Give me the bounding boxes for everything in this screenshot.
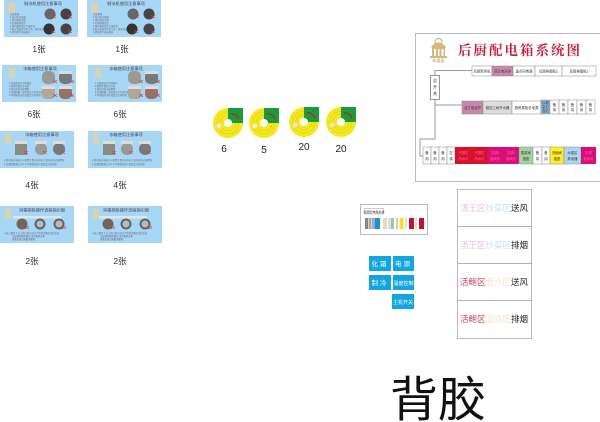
button: 制冷: 制冷	[372, 278, 388, 287]
card: fridge notice 4 photos, left: 冰箱使用注意事项	[23, 65, 58, 72]
card: ice machine notice, left: 4.保持通风良好干燥环境	[10, 24, 36, 28]
card: ice machine notice, right: 2.请勿堆放杂物	[93, 18, 109, 22]
card: fridge notice 3 photos, right: 1.请勿敞开冰箱门 2.熟食生食分开存放 3.请勿存放过热食物	[92, 158, 153, 162]
card: ice machine notice, right: 4.保持通风良好干燥环境	[93, 24, 119, 28]
card: fridge notice 3 photos, right: 冰箱使用注意事项	[109, 131, 144, 138]
row 1 breakers: 重点间电源	[516, 68, 533, 74]
quantity label: 6张	[27, 109, 41, 119]
disk count: 6	[221, 144, 227, 155]
card: fridge notice 4 photos, left	[2, 65, 76, 102]
row 1 breakers: 后厨排烟机1	[539, 68, 558, 74]
card: ice machine notice, right: 注意事项	[93, 12, 103, 16]
button: 电源: 电源	[395, 259, 412, 268]
main switch: 关	[433, 90, 437, 97]
card: fridge notice 4 photos, right: 5.不得擅自调节温度及关闭电源	[95, 93, 127, 97]
button: 主机开关	[392, 294, 414, 309]
card: sterilizer steps, left	[0, 206, 74, 243]
card: ice machine notice, right: 制冰机使用注意事项	[107, 0, 146, 7]
card: ice machine notice, left: 3.定期更换滤芯	[10, 21, 26, 25]
card: ice machine notice, left: 1.每日清洁机器	[10, 15, 26, 19]
card: fridge notice 3 photos, left	[0, 131, 74, 168]
card: fridge notice 3 photos, left: 4.定期除霜清洁卫生 5.不得擅自调节温度及关闭电源	[4, 162, 57, 166]
card: fridge notice 4 photos, left: 4.定期除霜，保持清洁卫生及时清理	[9, 90, 46, 94]
row 2 breakers: 区灯	[542, 104, 549, 109]
diagram title: 后厨配电箱系统图	[458, 39, 582, 59]
row 1 breakers	[472, 66, 596, 76]
panel: distribution box system diagram	[416, 34, 600, 182]
row 2 breakers: 备	[553, 102, 557, 107]
quantity label: 1张	[32, 44, 46, 54]
card: ice machine notice, right: 6.请勿用手直接取冰	[93, 30, 114, 34]
quantity label: 4张	[113, 180, 127, 190]
wiring lines	[420, 70, 472, 156]
quantity label: 2张	[25, 256, 39, 266]
logo: 和喜居	[432, 57, 444, 63]
button: 温度控制: 温度控制	[393, 280, 414, 287]
row label: 活鲍区 面点区 排烟: 活鲍区面点区排烟	[460, 314, 528, 324]
card: fridge notice 3 photos, left: 1.请勿敞开冰箱门 2.熟食生食分开存放 3.请勿存放过热食物	[4, 158, 65, 162]
card: ice machine notice, right: 1.每日清洁机器	[93, 15, 109, 19]
table: zone fan labels	[458, 190, 532, 338]
main switch	[430, 76, 440, 100]
card: ice machine notice, left	[4, 0, 78, 37]
row 2 breakers: 活王电波炉	[464, 105, 482, 110]
row 3 breakers: 汽源灯	[474, 150, 485, 155]
row 2 breakers: 粗加工间开水器	[486, 105, 510, 110]
row 3 breakers: 抽风机	[583, 156, 594, 161]
row 1 breakers: 后厨新风机	[474, 68, 491, 74]
card: fridge notice 3 photos, right: 4.定期除霜清洁卫生 5.不得擅自调节温度及关闭电源	[92, 162, 145, 166]
row label: 汤王区 炒菜区 排烟: 汤王区炒菜区排烟	[460, 240, 528, 250]
disk count: 20	[298, 142, 310, 153]
row 2 breakers: 用	[571, 108, 574, 112]
row 1 breakers: 汤王电开炉	[494, 68, 512, 74]
card: sterilizer steps, right: 注意餐具摆放整齐 请勿堆放杂物	[100, 234, 133, 238]
button: 主机开关: 主机开关	[393, 299, 413, 306]
card: fridge notice 4 photos, left: 2.熟食生食分开存放	[9, 84, 30, 88]
disk count: 20	[335, 144, 347, 155]
row 3 breakers: 抽风机	[506, 156, 517, 161]
row 3 breakers: 抽风机	[490, 156, 501, 161]
quantity label: 2张	[113, 256, 127, 266]
row 3 breakers: 空调2	[507, 150, 515, 155]
button: 电源	[393, 256, 414, 271]
row 2 breakers: 备	[589, 102, 593, 107]
icon: yellow disk sticker 2	[249, 108, 279, 138]
row 3 breakers: 备	[544, 150, 548, 155]
card: sterilizer steps, right: 消毒完成后再取用餐具	[100, 237, 124, 241]
card: fridge notice 4 photos, left: 3.请勿存放过热食物	[9, 87, 30, 91]
card: fridge notice 4 photos, left: 5.不得擅自调节温度及关闭电源	[9, 93, 41, 97]
card: fridge notice 4 photos, right: 2.熟食生食分开存放	[95, 84, 116, 88]
row 3 breakers: 插座	[523, 156, 530, 161]
row 3 breakers: 备	[441, 150, 445, 155]
row 3 breakers: 蒸电器	[567, 156, 578, 161]
row 3 breakers: 用	[425, 157, 429, 161]
card: fridge notice 3 photos, left: 冰箱使用注意事项	[25, 131, 60, 138]
icon: yellow disk sticker 1	[213, 108, 243, 138]
row 3 breakers: 备	[433, 150, 437, 155]
card: ice machine notice, left: 注意事项	[10, 12, 20, 16]
card: sterilizer steps, left: 1.放入餐具 2.关上柜门按下开关 3.等待消毒完成后取出	[4, 231, 60, 235]
button: 化霜	[369, 256, 391, 271]
main switch: 总	[433, 77, 437, 83]
main switch: 开	[433, 84, 437, 90]
row 3 breakers: 空	[449, 150, 453, 155]
row 2 breakers: 用	[589, 108, 592, 112]
disk count: 5	[261, 145, 267, 156]
quantity label: 6张	[113, 109, 127, 119]
row 3 breakers: 备	[425, 150, 429, 155]
row 3 breakers: 热水灯	[474, 156, 485, 161]
card: ice machine notice, left: 5.取冰请使用专用工具，保持清洁	[10, 27, 45, 31]
quantity label: 1张	[115, 44, 129, 54]
card: fridge notice 4 photos, right: 冰箱使用注意事项	[109, 65, 144, 72]
card: sterilizer steps, left: 注意餐具摆放整齐 请勿堆放杂物	[12, 234, 45, 238]
card: fridge notice 4 photos, right: 4.定期除霜，保持清洁卫生及时清理	[95, 90, 132, 94]
row 2 breakers: 厨房蒸柜总电源	[515, 105, 539, 110]
row 3 breakers: 空调	[585, 150, 592, 155]
card: fridge notice 4 photos, right	[88, 65, 162, 102]
button: 化霜: 化霜	[372, 259, 388, 268]
row 3 breakers: 炒菜区	[567, 150, 578, 155]
row label: 汤王区 炒菜区 送风: 汤王区炒菜区送风	[460, 203, 529, 213]
card: ice machine notice, right: 5.取冰请使用专用工具，保持清洁	[93, 27, 128, 31]
row 2 breakers: 备	[562, 102, 566, 107]
card: ice machine notice, right: 3.定期更换滤芯	[93, 21, 109, 25]
row 3 breakers	[423, 147, 596, 164]
row label: 活鲍区 面点区 送风: 活鲍区面点区送风	[460, 277, 529, 287]
row 2 breakers: 炒菜	[542, 100, 549, 105]
panel: small control strip: 后厨配电箱系统	[363, 209, 385, 214]
card: ice machine notice, left: 2.请勿堆放杂物	[10, 18, 26, 22]
card: sterilizer steps, right	[88, 206, 162, 243]
row 3 breakers: 洗碗间	[552, 150, 563, 155]
row 3 breakers: 调	[449, 156, 453, 161]
button: 制冷	[369, 275, 391, 290]
panel: small control strip	[360, 204, 428, 234]
row 2 breakers: 备	[571, 102, 575, 107]
card: ice machine notice, left: 6.请勿用手直接取冰	[10, 30, 31, 34]
logo	[430, 38, 447, 63]
quantity label: 4张	[25, 180, 39, 190]
row 2 breakers: 用	[562, 108, 565, 112]
row 2 breakers: 及灯	[542, 108, 549, 113]
row 2 breakers	[462, 100, 595, 114]
card: ice machine notice, right	[87, 0, 161, 37]
card: fridge notice 4 photos, left: 1.冰箱请勿长时间敞开	[9, 81, 32, 85]
row 2 breakers: 用	[553, 108, 556, 112]
card: fridge notice 4 photos, right: 1.冰箱请勿长时间敞开	[95, 81, 118, 85]
icon: yellow disk sticker 3	[289, 107, 319, 137]
row 3 breakers: 用	[433, 157, 437, 161]
icon: yellow disk sticker 4	[326, 107, 356, 137]
card: sterilizer steps, right: 1.放入餐具 2.关上柜门按下开关 3.等待消毒完成后取出	[92, 231, 148, 235]
row 3 breakers: 用	[536, 157, 539, 161]
card: fridge notice 3 photos, right	[88, 131, 162, 168]
row 3 breakers: 用	[544, 157, 548, 161]
row 3 breakers: 蒸菜间	[521, 150, 532, 155]
row 3 breakers: 热水灯	[458, 156, 469, 161]
row 3 breakers: 用	[441, 157, 445, 161]
button: 温度控制	[393, 275, 414, 290]
row 2 breakers: 备	[580, 102, 584, 107]
card: sterilizer steps, left: 消毒碗柜操作流程指引图	[19, 206, 65, 214]
card: ice machine notice, left: 制冰机使用注意事项	[24, 0, 63, 7]
row 3 breakers: 备	[536, 150, 540, 155]
card: sterilizer steps, left: 消毒完成后再取用餐具	[12, 237, 36, 241]
row 3 breakers: 空调1	[491, 150, 499, 155]
row 2 breakers: 用	[580, 108, 583, 112]
row 3 breakers: 汽源灯	[458, 150, 469, 155]
card: sterilizer steps, right: 消毒碗柜操作流程指引图	[103, 206, 149, 214]
card: fridge notice 4 photos, right: 3.请勿存放过热食物	[95, 87, 116, 91]
row 3 breakers: 插座	[554, 156, 561, 161]
row 1 breakers: 后厨排烟机2	[570, 68, 589, 74]
